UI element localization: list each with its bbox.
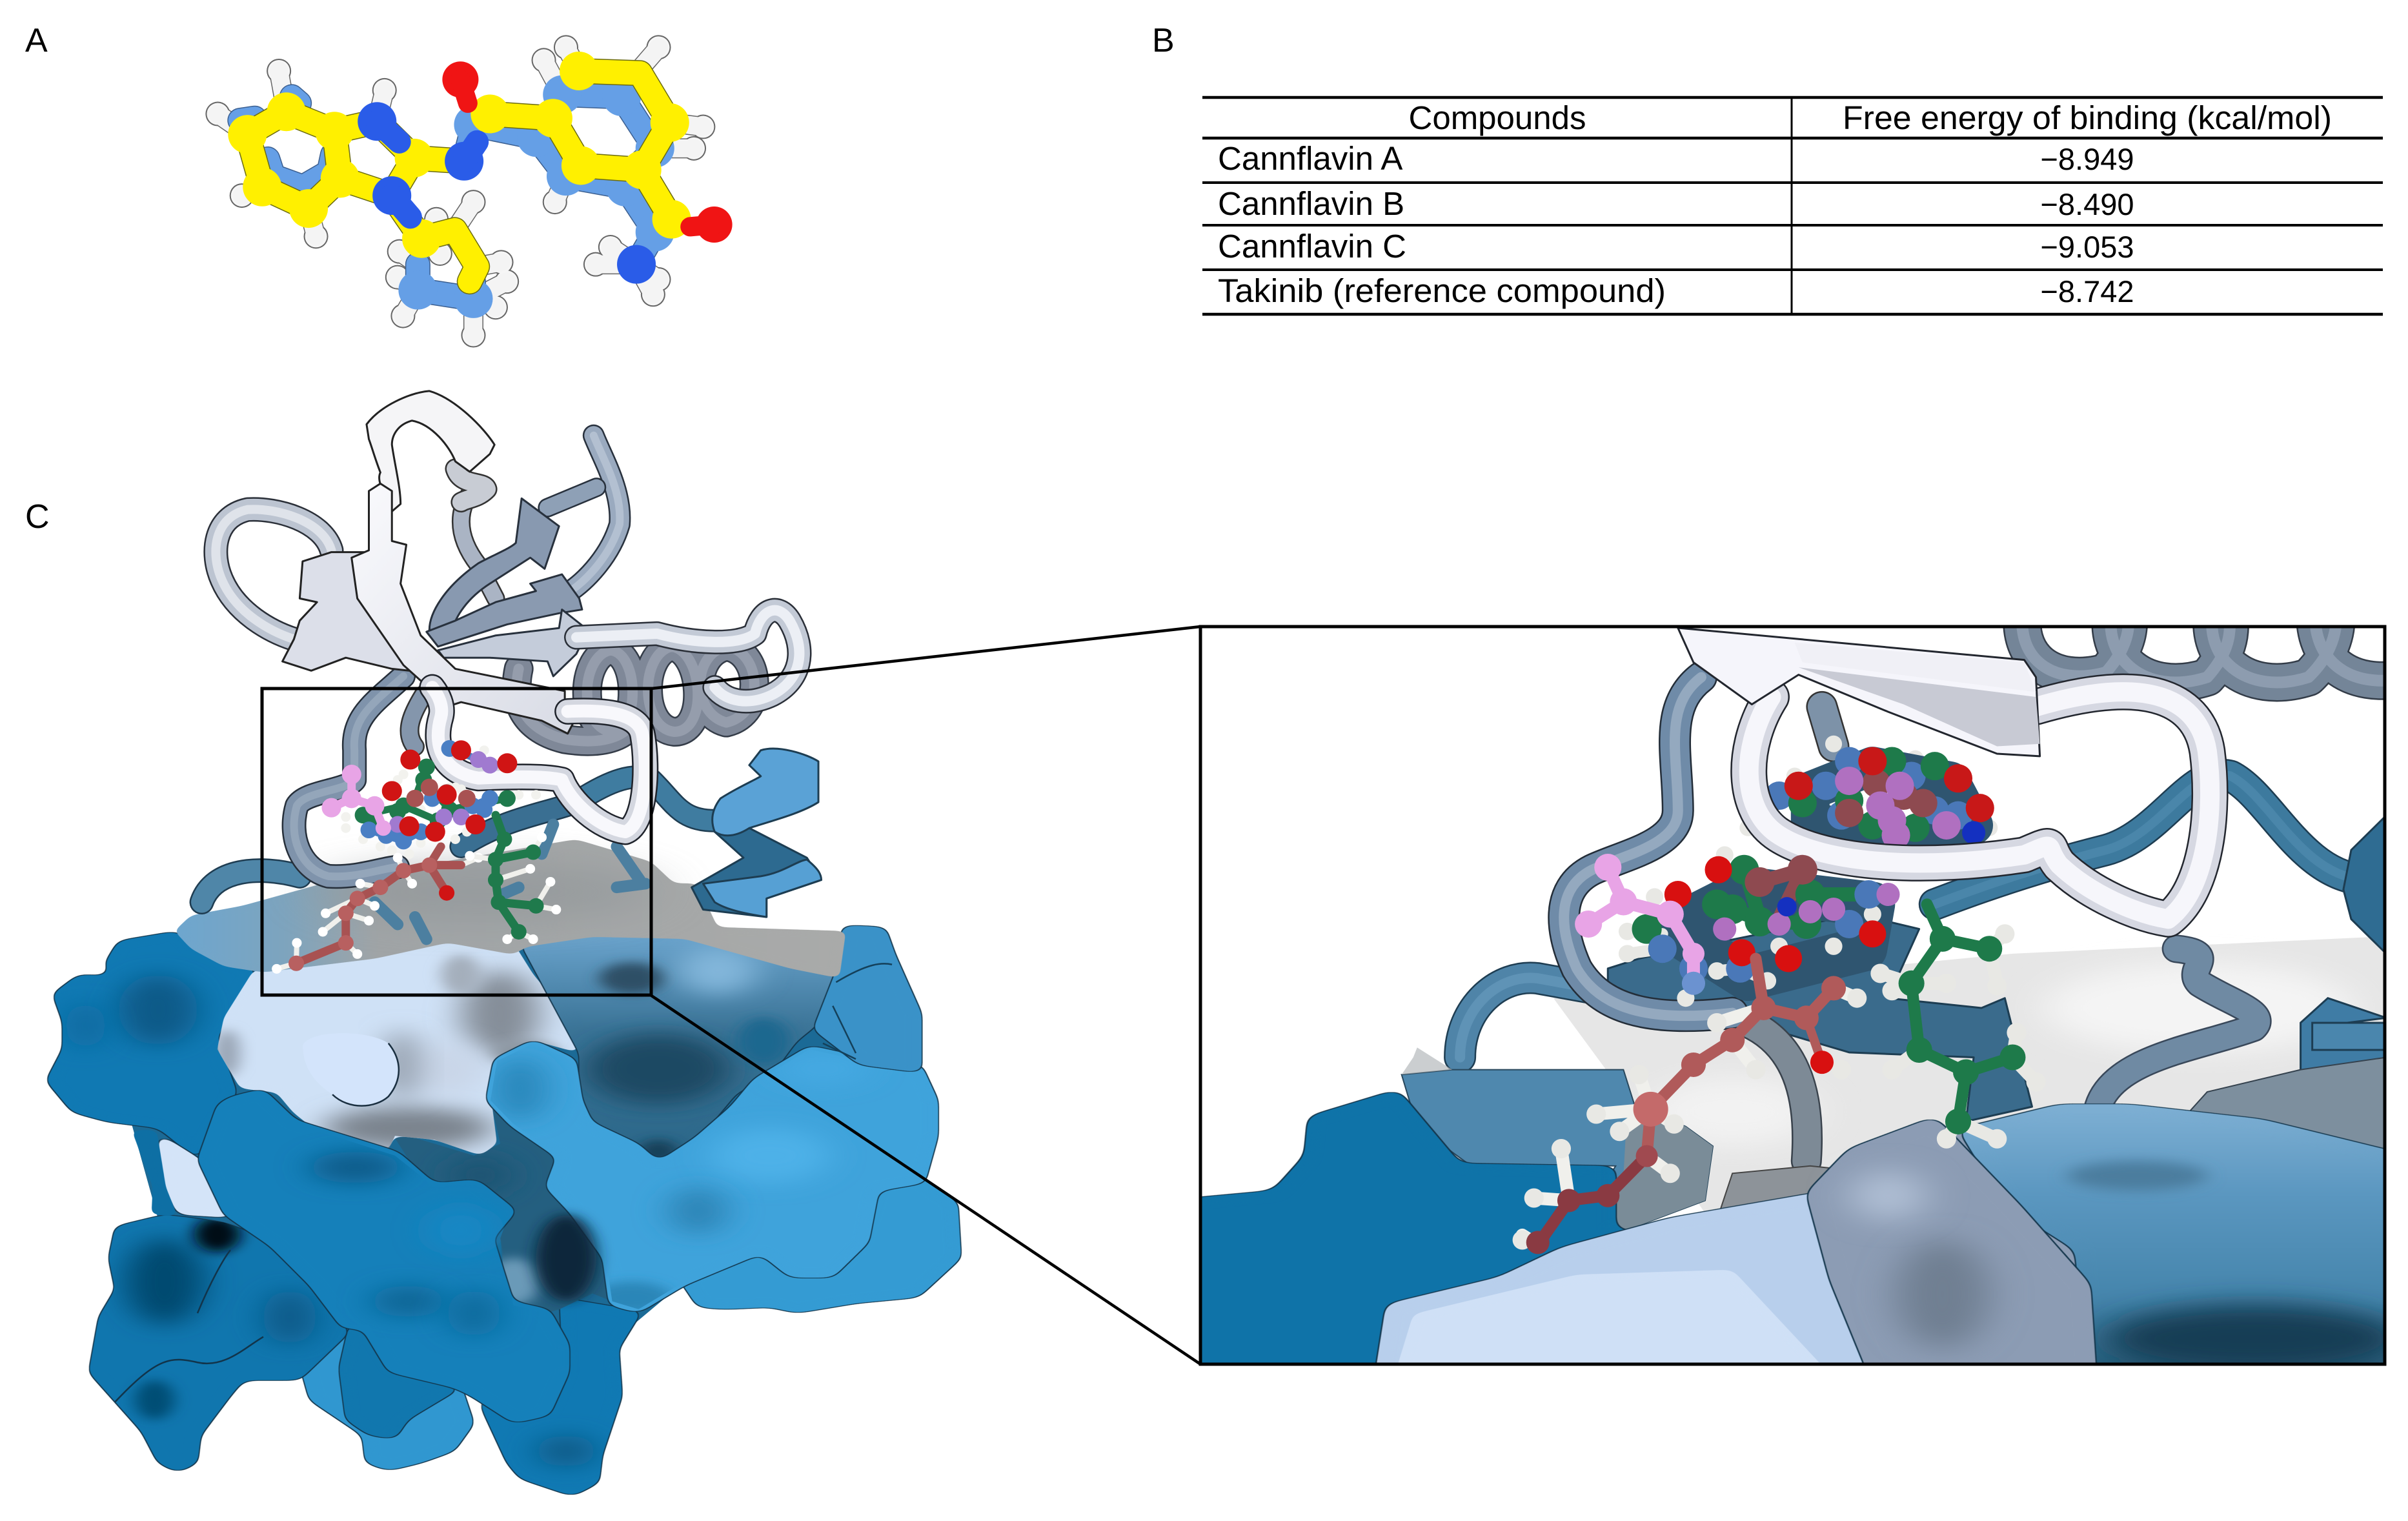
light-blue molecule — [240, 95, 655, 299]
table energy values: −8.742 — [2040, 274, 2134, 308]
surface: lower-left lobe — [89, 1214, 349, 1473]
panel C inset: close-up of binding site — [1202, 629, 2383, 1363]
inset frame — [1200, 627, 2385, 1364]
surface: bottom dark piece — [339, 1325, 461, 1439]
surface: white binding patch — [214, 939, 580, 1156]
nitrogen atoms — [377, 121, 636, 265]
ribbon: left pale sheet — [283, 552, 427, 672]
panel label C: C — [25, 498, 50, 536]
table row labels: Cannflavin B — [1218, 185, 1404, 222]
table row labels: Takinib (reference compound) — [1218, 272, 1666, 309]
surface: lower-center lobe — [474, 1297, 642, 1496]
inset: ligand cluster front — [1627, 855, 1888, 998]
table rules — [1202, 97, 2383, 314]
hydrogen atoms — [218, 47, 703, 336]
inset: pale surface — [1370, 1188, 2102, 1403]
inset: central lower tube — [1748, 1023, 1807, 1161]
ribbon: central white strand — [352, 483, 576, 734]
table energy values: −8.490 — [2040, 187, 2134, 221]
panel B: binding energy table — [1202, 97, 2383, 314]
ribbon: small blue bits on plane — [374, 825, 645, 939]
ribbon: upper right tube — [547, 436, 620, 593]
zoom box on full protein — [262, 689, 651, 995]
inset: ligand cluster rear — [1748, 744, 1989, 840]
ribbon: grey arrow strands — [427, 498, 588, 676]
surface: central blue lobe — [197, 1089, 569, 1424]
pink ligand — [331, 774, 383, 828]
brown ligand chain — [277, 847, 478, 969]
ribbon: white top hairpin — [367, 391, 494, 511]
inset: white loop and strand — [1678, 628, 2210, 919]
table header: Compounds — [1408, 99, 1586, 136]
panel C: protein ribbon — [202, 391, 822, 939]
table row labels: Cannflavin A — [1218, 140, 1402, 177]
ribbon: thin back tubes — [294, 468, 496, 876]
inset: grey surface fold — [1806, 1116, 2098, 1403]
table row labels — [1218, 140, 1666, 309]
table row labels: Cannflavin C — [1218, 228, 1406, 265]
inset: left blue tube — [1460, 978, 1592, 1057]
surface: shadowed right-upper region — [520, 933, 843, 1163]
yellow molecule — [247, 71, 672, 281]
surface: lower white patch — [157, 1132, 234, 1218]
inset: translucent block — [1402, 1047, 1713, 1254]
surface: central shadowed cavity — [395, 1109, 607, 1311]
inset: blue tube right — [1935, 775, 2363, 904]
table energy values — [2040, 142, 2134, 308]
panel label A: A — [25, 22, 48, 59]
inset: back plane — [1553, 936, 2386, 1230]
panel A: overlaid molecule structures — [218, 47, 714, 336]
ribbon: helix coils — [517, 647, 754, 741]
ribbon: top white tube — [216, 509, 799, 701]
ribbon: blue helix right — [692, 749, 822, 917]
inset: dark blue surface — [1164, 1089, 1694, 1403]
surface: right strip — [813, 925, 922, 1073]
inset: right blue surface — [1958, 1104, 2408, 1403]
inset: dark blue ribbon mass — [1608, 914, 2032, 1122]
panel C: docked ligands — [277, 749, 556, 969]
inset: under-fold fill — [1771, 1122, 2121, 1383]
inset: grey-blue loop tube — [1564, 677, 1732, 1016]
inset: vertical back tube — [1822, 707, 1834, 747]
inset: pink ligand — [1588, 867, 1694, 983]
table energy values: −8.949 — [2040, 142, 2134, 176]
table header: Free energy of binding (kcal/mol) — [1843, 99, 2332, 136]
panel C: protein surface — [46, 839, 961, 1496]
ligand cluster behind loop — [346, 749, 536, 854]
table header — [1408, 99, 2332, 136]
surface: cut plane — [174, 839, 846, 978]
oxygen atoms — [460, 79, 714, 227]
panel label B: B — [1152, 22, 1175, 59]
inset: thin grey tube right — [2098, 949, 2258, 1107]
inset: helix coils top right — [2022, 603, 2408, 682]
green ligand chain — [470, 815, 556, 939]
surface: bright blue right lobe — [678, 1175, 961, 1313]
inset: grey ledge pieces — [1717, 1166, 1872, 1235]
ribbon: front white loop — [432, 687, 645, 832]
ribbon: lower blue strands — [202, 777, 714, 902]
surface: interior base — [132, 943, 918, 1416]
inset: green ligand chain — [1880, 904, 2036, 1139]
inset: brown ligand chain — [1523, 959, 1857, 1245]
surface: pale lobe — [303, 1033, 399, 1106]
zoom connector lines — [651, 627, 1200, 1364]
surface: dark pit — [536, 1214, 596, 1302]
inset: right helix blue pieces — [2301, 816, 2390, 1085]
surface: upper-left lobe — [46, 931, 257, 1160]
table energy values: −9.053 — [2040, 230, 2134, 264]
surface: bottom light lobe — [293, 1333, 474, 1471]
